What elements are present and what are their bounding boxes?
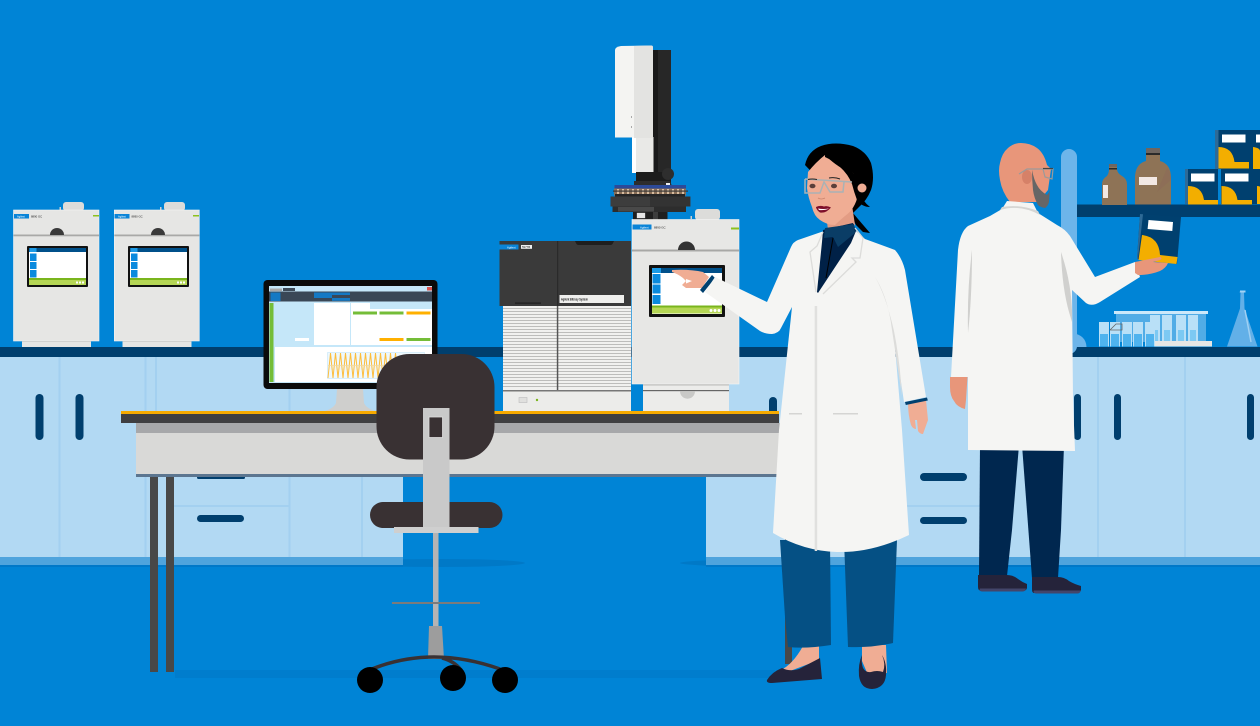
back counter with cabinets: [0, 347, 1260, 567]
left GC instrument 1: [14, 202, 99, 347]
autosampler tower: [615, 46, 674, 186]
mass spectrometer: Agilent Bitrosy System: [561, 298, 588, 302]
monitor stand: [325, 389, 375, 411]
mass spectrometer: [500, 241, 631, 411]
shelf with bottles and boxes: [1061, 130, 1260, 354]
glassware on counter: [1099, 290, 1258, 346]
left GC instrument 1: 8890 GC: [31, 214, 42, 218]
left GC instrument 2: [114, 202, 199, 347]
mass spectrometer: 5977B: [522, 245, 530, 249]
office chair: [357, 354, 518, 693]
floor shadows: [175, 559, 900, 678]
GC instrument centre: [632, 209, 739, 411]
left GC instrument 2: 8890 GC: [132, 214, 143, 218]
GC instrument centre: Agilent: [640, 225, 649, 229]
woman scientist: [672, 144, 928, 689]
left GC instrument 1: Agilent: [17, 214, 25, 218]
computer monitor: [264, 280, 438, 389]
GC instrument centre: 8890 GC: [654, 225, 666, 229]
mass spectrometer: Agilent: [507, 245, 516, 249]
left GC instrument 2: Agilent: [118, 214, 126, 218]
sample carousel tray: [610, 185, 690, 220]
lab bench table: [121, 411, 792, 672]
book held by man: [1135, 214, 1181, 275]
man scientist: [950, 143, 1140, 594]
